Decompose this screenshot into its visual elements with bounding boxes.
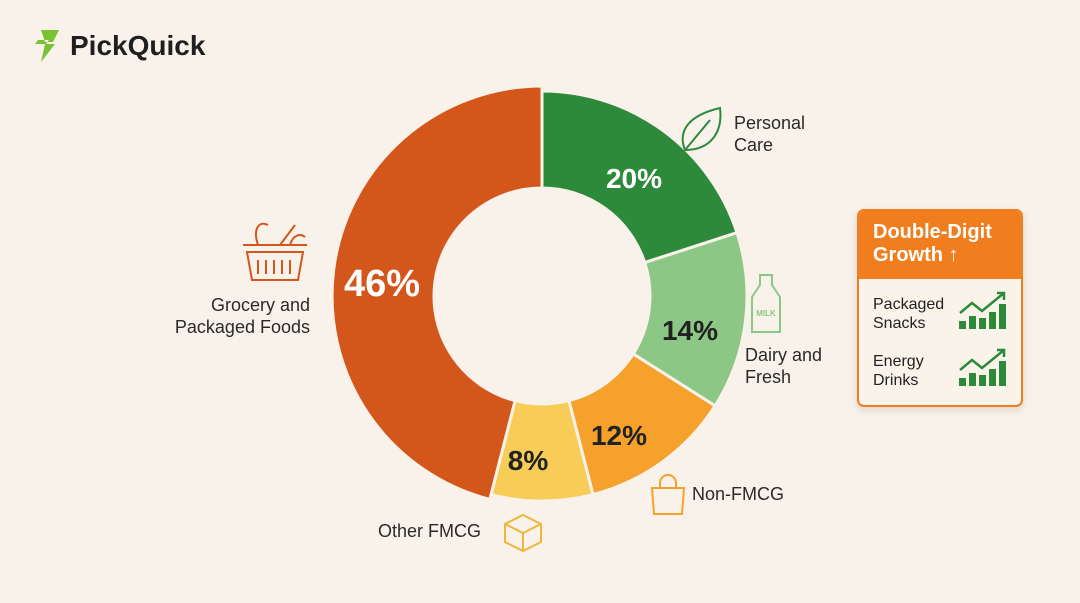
item: energy drinks [873, 353, 924, 389]
icon: growth chart 1 [959, 292, 1006, 329]
slice: grocery 46% [332, 86, 542, 499]
slice: personal care 20% [542, 91, 737, 263]
item: energy drinks: Energy [873, 353, 924, 370]
slice: non-fmcg 12% [569, 354, 715, 495]
brand name: PickQuick [70, 30, 205, 61]
icon: basket [243, 224, 307, 280]
icon: milk bottle: MILK [756, 309, 776, 318]
value 14%: 14% [662, 315, 718, 346]
callout header: Double-Digit [873, 221, 992, 243]
callout header [859, 211, 1021, 279]
icon: logo bolt [35, 30, 59, 62]
slice: other 8% [491, 401, 593, 501]
label: dairy: Fresh [745, 367, 791, 387]
slice: dairy 14% [633, 233, 747, 406]
icon: leaf [683, 108, 720, 150]
item: packaged snacks: Packaged [873, 296, 944, 313]
value 8%: 8% [508, 445, 548, 476]
label: other fmcg: Other FMCG [378, 521, 481, 541]
label: grocery: Packaged Foods [175, 317, 310, 337]
label: personal care: Personal [734, 113, 805, 133]
icon: growth chart 2 [959, 348, 1006, 386]
label: personal care [734, 113, 805, 155]
label: grocery [175, 295, 310, 337]
value 20%: 20% [606, 163, 662, 194]
callout header: Growth ↑ [873, 244, 959, 266]
callout: double-digit growth [857, 209, 1023, 407]
logo [35, 30, 206, 62]
icon: milk bottle [752, 275, 780, 332]
icon: box [505, 515, 541, 551]
value 46%: 46% [344, 263, 420, 305]
label: non-fmcg: Non-FMCG [692, 484, 784, 504]
label: personal care: Care [734, 135, 773, 155]
value 12%: 12% [591, 420, 647, 451]
item: energy drinks: Drinks [873, 372, 918, 389]
icon: shopping bag [652, 475, 684, 514]
item: packaged snacks [873, 296, 944, 332]
label: dairy [745, 345, 822, 387]
label: dairy: Dairy and [745, 345, 822, 365]
label: grocery: Grocery and [211, 295, 310, 315]
item: packaged snacks: Snacks [873, 315, 925, 332]
